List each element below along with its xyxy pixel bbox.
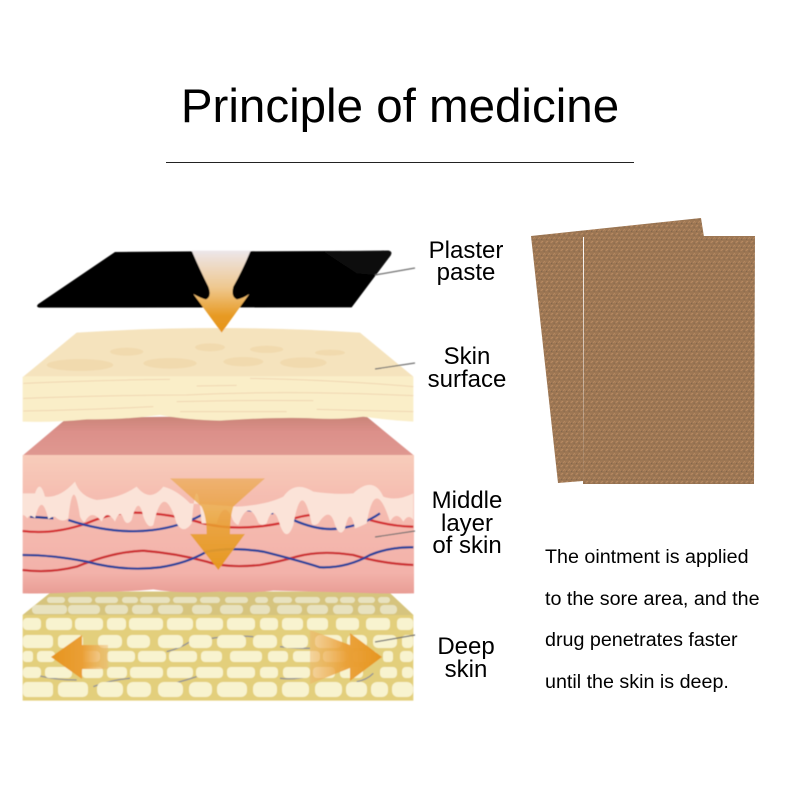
left arrow in deep layer: [51, 635, 108, 679]
label: middle layer of skin: Middle: [432, 487, 502, 514]
skin surface layer: [23, 251, 413, 422]
title: Principle of medicine: [181, 80, 619, 133]
description text: The ointment is applied: [545, 546, 749, 568]
label: middle layer of skin: layer: [441, 510, 493, 537]
label: deep skin: Deep: [437, 633, 495, 660]
arrow through middle layer: [170, 478, 265, 570]
back patch: [531, 218, 704, 483]
label: deep skin: skin: [445, 656, 487, 683]
label: skin surface: Skin: [444, 343, 490, 370]
description text: drug penetrates faster: [545, 629, 738, 651]
plaster patches: [531, 218, 755, 484]
label: skin surface: surface: [428, 366, 506, 393]
middle layer top face: [23, 416, 413, 462]
label: middle layer of skin: of skin: [432, 532, 502, 559]
skin surface front face: [23, 377, 413, 422]
fat cells: [23, 597, 413, 697]
arrow through plaster: [192, 251, 251, 333]
description text: to the sore area, and the: [545, 588, 760, 610]
label: plaster paste: paste: [437, 259, 495, 286]
deep skin layer: [23, 592, 413, 701]
description text: until the skin is deep.: [545, 671, 729, 693]
title underline: [166, 162, 634, 163]
label: plaster paste: Plaster: [429, 237, 503, 264]
leader lines: [375, 268, 415, 642]
layered skin diagram: [23, 251, 415, 701]
front patch: [583, 236, 755, 484]
plaster paste sheet: [37, 251, 391, 308]
grey capillaries in fat: [40, 636, 373, 687]
skin surface top face: [23, 328, 413, 377]
right arrow in deep layer: [310, 630, 382, 684]
blood vessels: [23, 510, 413, 571]
middle skin layer: [23, 416, 414, 594]
middle layer front face: [23, 455, 414, 594]
plaster highlight corner: [323, 251, 391, 275]
papillae band: [23, 482, 413, 534]
